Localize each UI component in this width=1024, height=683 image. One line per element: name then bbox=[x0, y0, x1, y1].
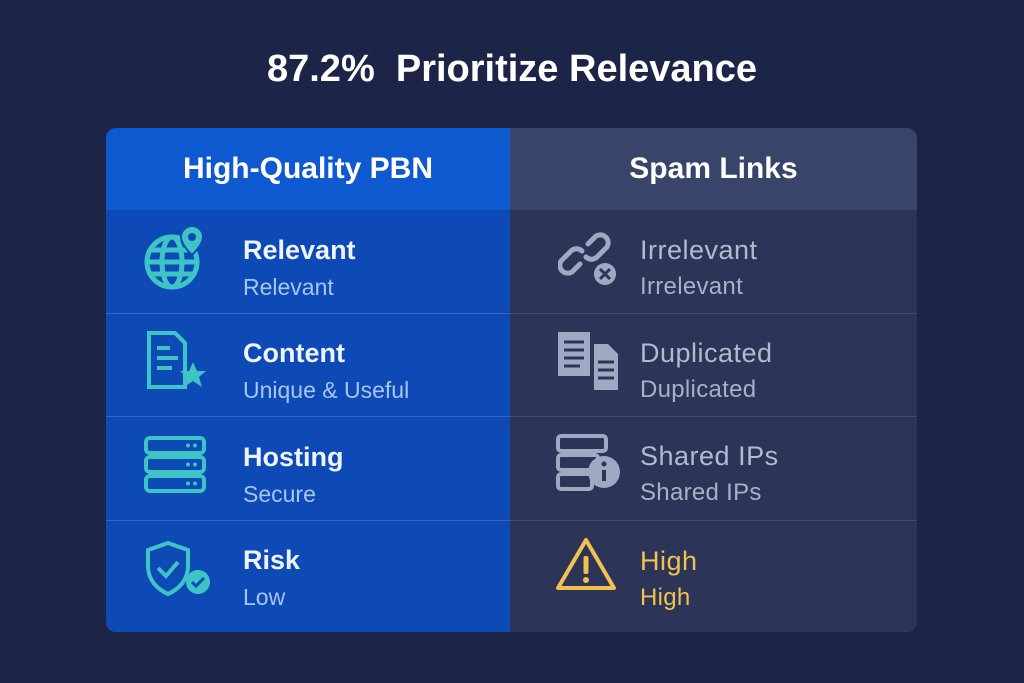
icon: shield check bbox=[146, 540, 210, 596]
text: Hosting: Secure bbox=[243, 481, 316, 507]
text: Risk: Low bbox=[243, 584, 285, 610]
table bbox=[106, 128, 917, 632]
text: Irrelevant bbox=[640, 235, 758, 300]
text: Duplicated: Duplicated bbox=[640, 376, 756, 403]
heading: High-Quality PBN bbox=[106, 128, 510, 210]
heading: Spam Links: Spam Links bbox=[629, 152, 798, 185]
text: Duplicated: Duplicated bbox=[640, 338, 773, 368]
text: Shared IPs: Shared IPs bbox=[640, 441, 779, 471]
heading: High-Quality PBN: High-Quality PBN bbox=[183, 152, 433, 185]
text: High: High bbox=[640, 546, 698, 576]
icon: document star bbox=[147, 331, 206, 389]
text: Relevant: Relevant bbox=[243, 235, 356, 265]
text: Duplicated bbox=[640, 338, 773, 403]
text: Hosting: Hosting bbox=[243, 442, 344, 472]
icon: server info bbox=[556, 434, 620, 491]
title: 87.2% Prioritize Relevance bbox=[267, 48, 757, 90]
text: Content: Content bbox=[243, 338, 345, 368]
icon: duplicated documents bbox=[558, 332, 618, 390]
text: Content: Unique & Useful bbox=[243, 377, 409, 403]
text: Irrelevant: Irrelevant bbox=[640, 235, 758, 265]
panel: high-quality PBN column bbox=[106, 128, 510, 632]
text: Relevant: Relevant bbox=[243, 274, 334, 300]
icon: server bbox=[144, 436, 206, 493]
text: Risk: Risk bbox=[243, 545, 300, 575]
text: Shared IPs: Shared IPs bbox=[640, 479, 762, 506]
text: Content bbox=[243, 338, 409, 403]
text: Relevant bbox=[243, 235, 356, 300]
text: Hosting bbox=[243, 442, 344, 507]
icon: broken link bbox=[558, 232, 616, 285]
panel: spam links column bbox=[510, 128, 917, 632]
icon: globe pin bbox=[144, 227, 202, 290]
text: High bbox=[640, 546, 698, 611]
text: Risk bbox=[243, 545, 300, 610]
text: Shared IPs bbox=[640, 441, 779, 506]
icon: warning bbox=[556, 538, 616, 590]
text: High: High bbox=[640, 584, 691, 611]
heading: Spam Links bbox=[510, 128, 917, 210]
text: Irrelevant: Irrelevant bbox=[640, 273, 743, 300]
